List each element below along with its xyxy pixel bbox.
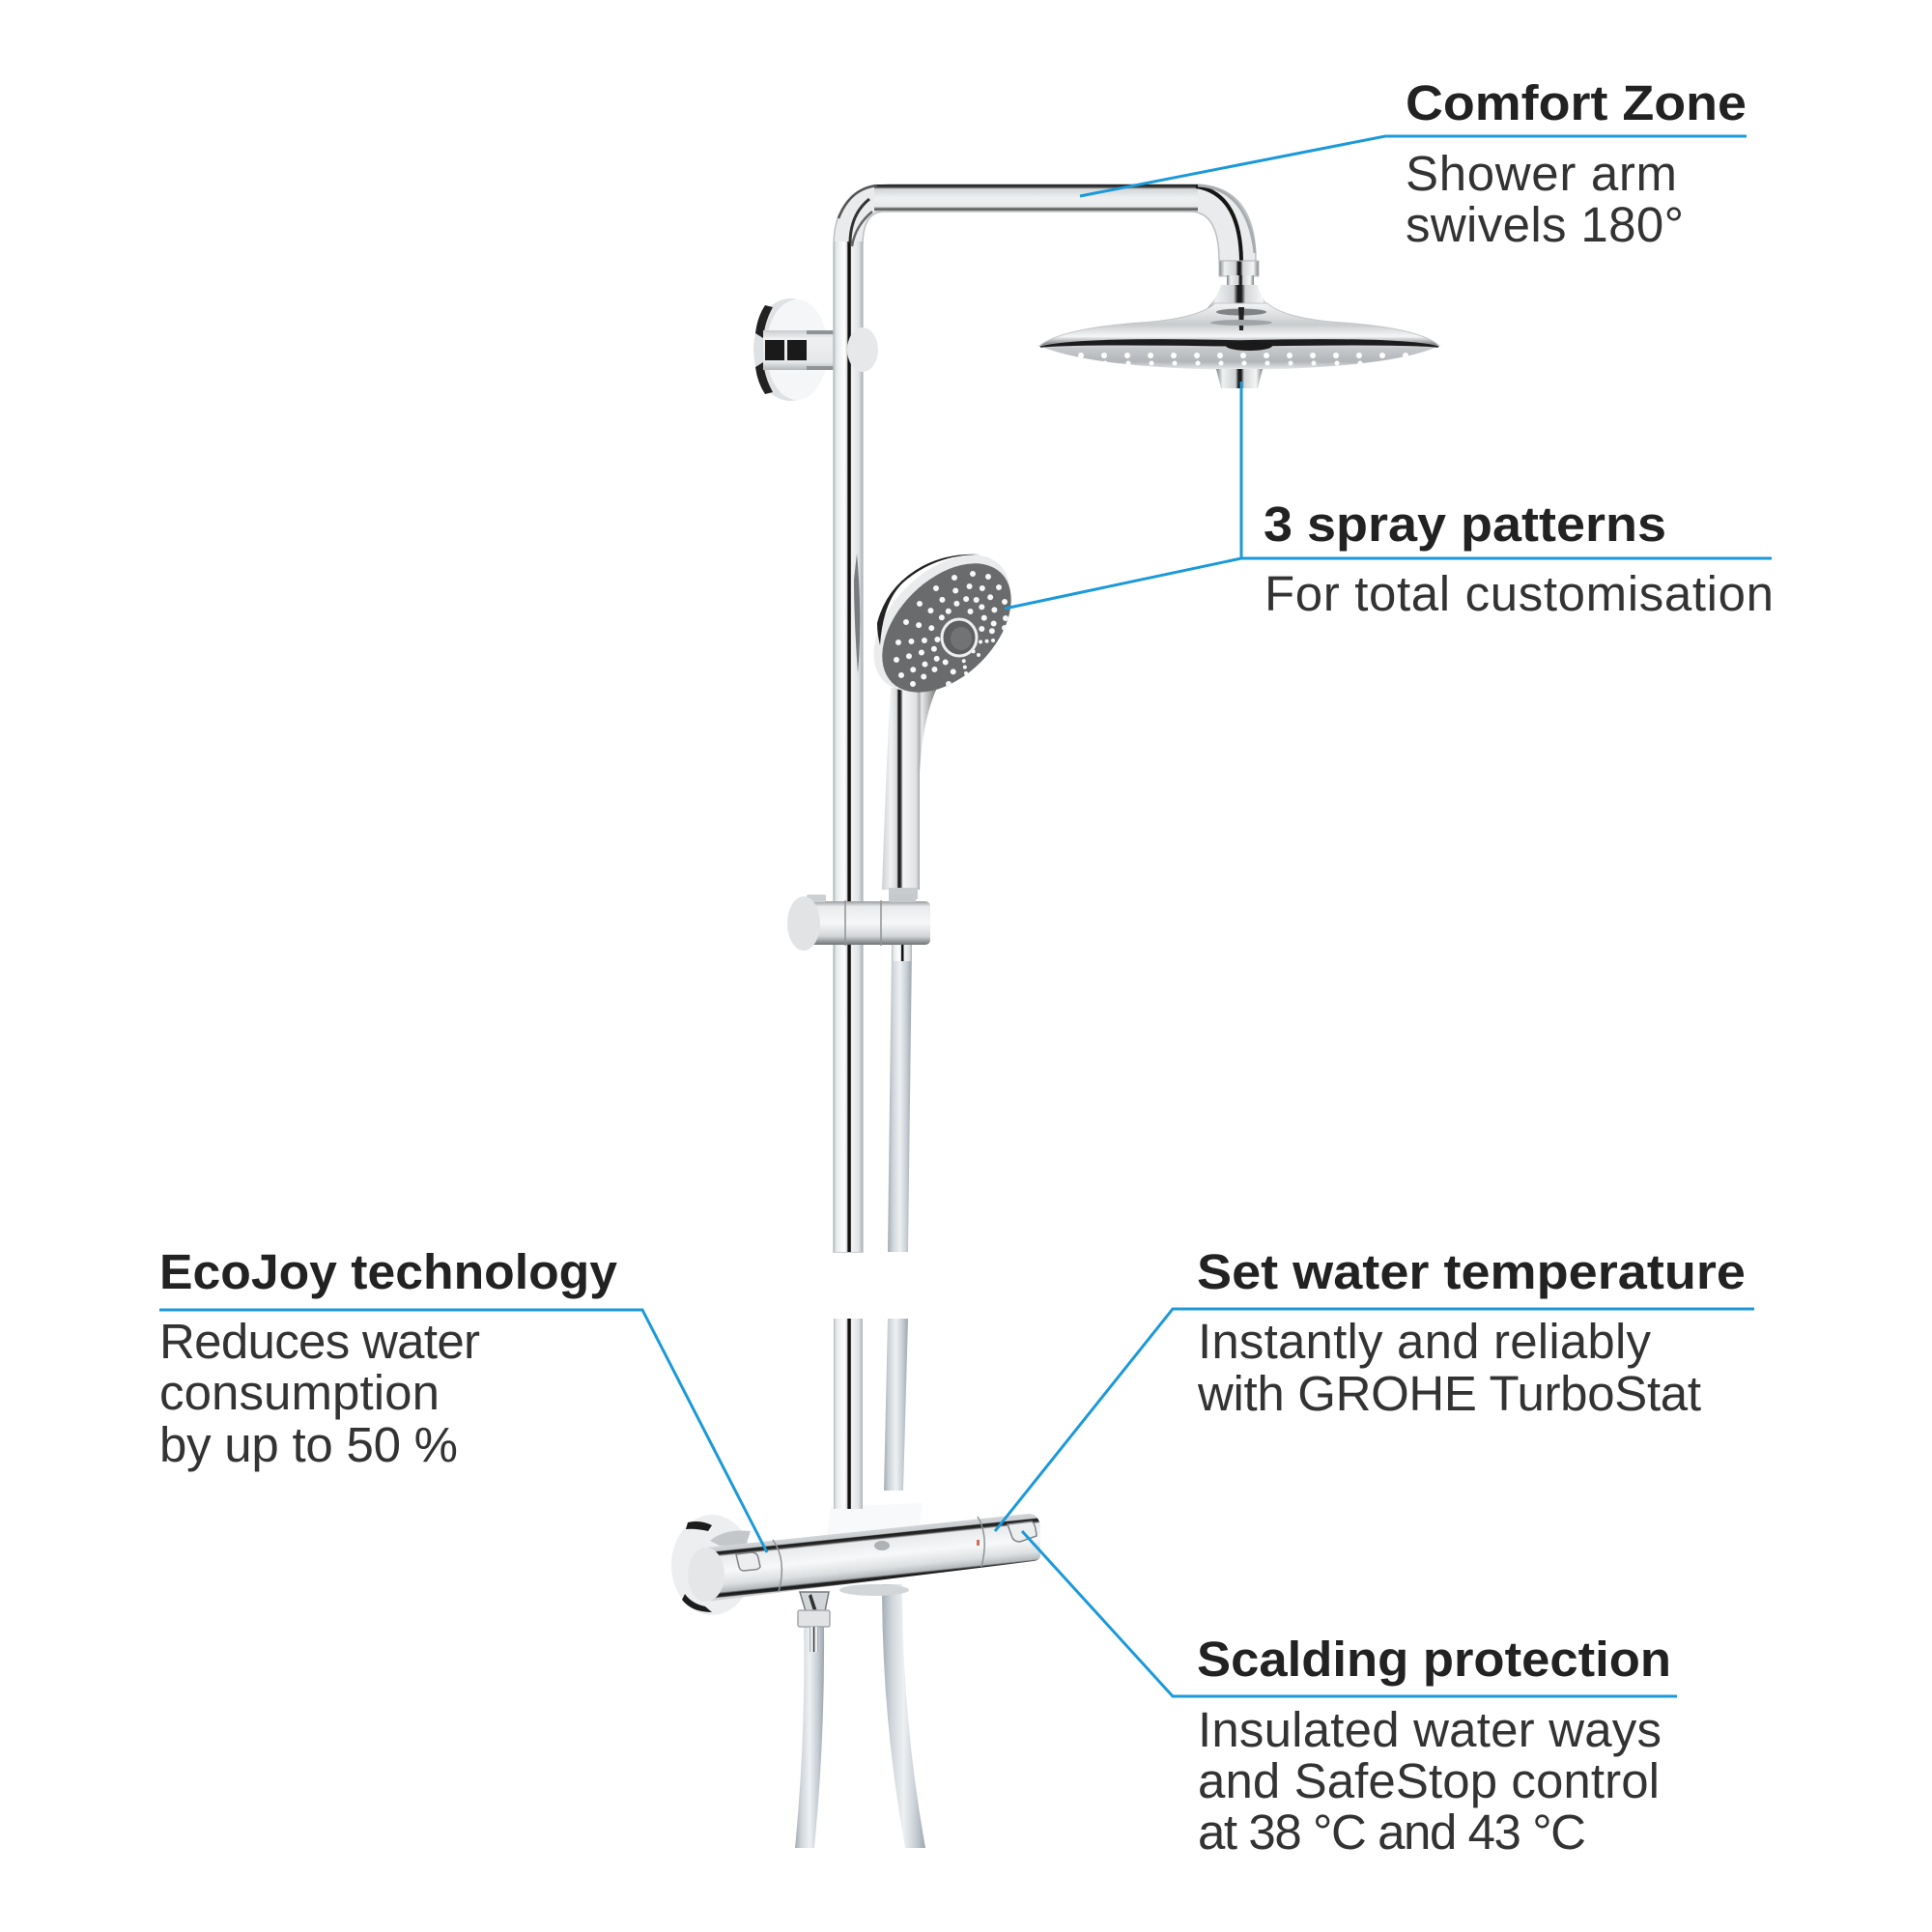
description xyxy=(159,1314,480,1472)
leader line xyxy=(1022,1531,1677,1696)
spray nozzles xyxy=(896,574,1006,684)
white mounting bracket xyxy=(827,1503,923,1536)
callout: Scalding protection xyxy=(1022,1531,1677,1860)
callout: 3 spray patterns xyxy=(1005,382,1774,621)
wall mount knob xyxy=(847,327,878,372)
thermostat mixer xyxy=(671,1514,1040,1615)
lower hoses xyxy=(795,1584,925,1848)
left temperature button xyxy=(736,1552,760,1571)
hand shower xyxy=(873,554,1011,899)
infographic canvas xyxy=(159,84,1772,1849)
overhead shower head xyxy=(1039,261,1439,388)
leader line xyxy=(1080,136,1747,196)
description: Instantly and reliably xyxy=(1198,1314,1652,1369)
description: For total customisation xyxy=(1264,566,1774,621)
right temperature button xyxy=(1008,1521,1037,1542)
swivel nut and cone xyxy=(1207,261,1271,309)
leader line xyxy=(159,1310,767,1552)
callout: Set water temperature xyxy=(995,1244,1754,1531)
leader line xyxy=(1005,382,1772,609)
spray head rim xyxy=(848,529,1036,717)
sliding holder xyxy=(787,895,930,951)
dense nozzle rows xyxy=(963,640,993,673)
leader line xyxy=(995,1309,1754,1531)
riser rail, lower section xyxy=(834,1319,863,1509)
handle xyxy=(882,688,937,899)
centre ring xyxy=(942,619,977,656)
callout: Comfort Zone xyxy=(1080,75,1747,252)
description xyxy=(1406,146,1684,252)
wall flange xyxy=(671,1515,909,1615)
description: with GROHE TurboStat xyxy=(1197,1366,1701,1421)
description: and SafeStop control xyxy=(1198,1753,1660,1808)
shower arm and riser rail xyxy=(834,185,1256,1252)
hose connector xyxy=(798,1592,830,1652)
heading: Comfort Zone xyxy=(1406,75,1747,130)
product illustration: shower system xyxy=(671,185,1439,1848)
logo mark xyxy=(874,1541,890,1550)
description: consumption xyxy=(159,1365,440,1420)
callout: EcoJoy technology xyxy=(159,1244,767,1552)
description: by up to 50 % xyxy=(159,1417,458,1472)
heading: Set water temperature xyxy=(1197,1244,1746,1299)
hose below holder xyxy=(892,942,912,961)
mixer body xyxy=(706,1514,1040,1602)
head underside with nozzles xyxy=(1039,337,1439,370)
description: swivels 180° xyxy=(1406,197,1684,252)
bottom nozzle xyxy=(1216,369,1263,388)
heading: Scalding protection xyxy=(1197,1632,1671,1687)
dial seams xyxy=(773,1517,984,1592)
description: at 38 °C and 43 °C xyxy=(1198,1804,1586,1860)
description: Reduces water xyxy=(159,1314,480,1369)
heading: 3 spray patterns xyxy=(1264,497,1666,552)
wall mount xyxy=(753,298,860,401)
description xyxy=(1197,1314,1701,1421)
hoses behind rail, upper section xyxy=(884,947,912,1491)
description: Shower arm xyxy=(1406,146,1677,201)
description: Insulated water ways xyxy=(1198,1702,1662,1757)
heading: EcoJoy technology xyxy=(159,1244,618,1299)
description xyxy=(1198,1702,1662,1860)
end cap xyxy=(688,1548,724,1602)
spray face xyxy=(858,539,1036,717)
head dome xyxy=(1039,303,1439,351)
